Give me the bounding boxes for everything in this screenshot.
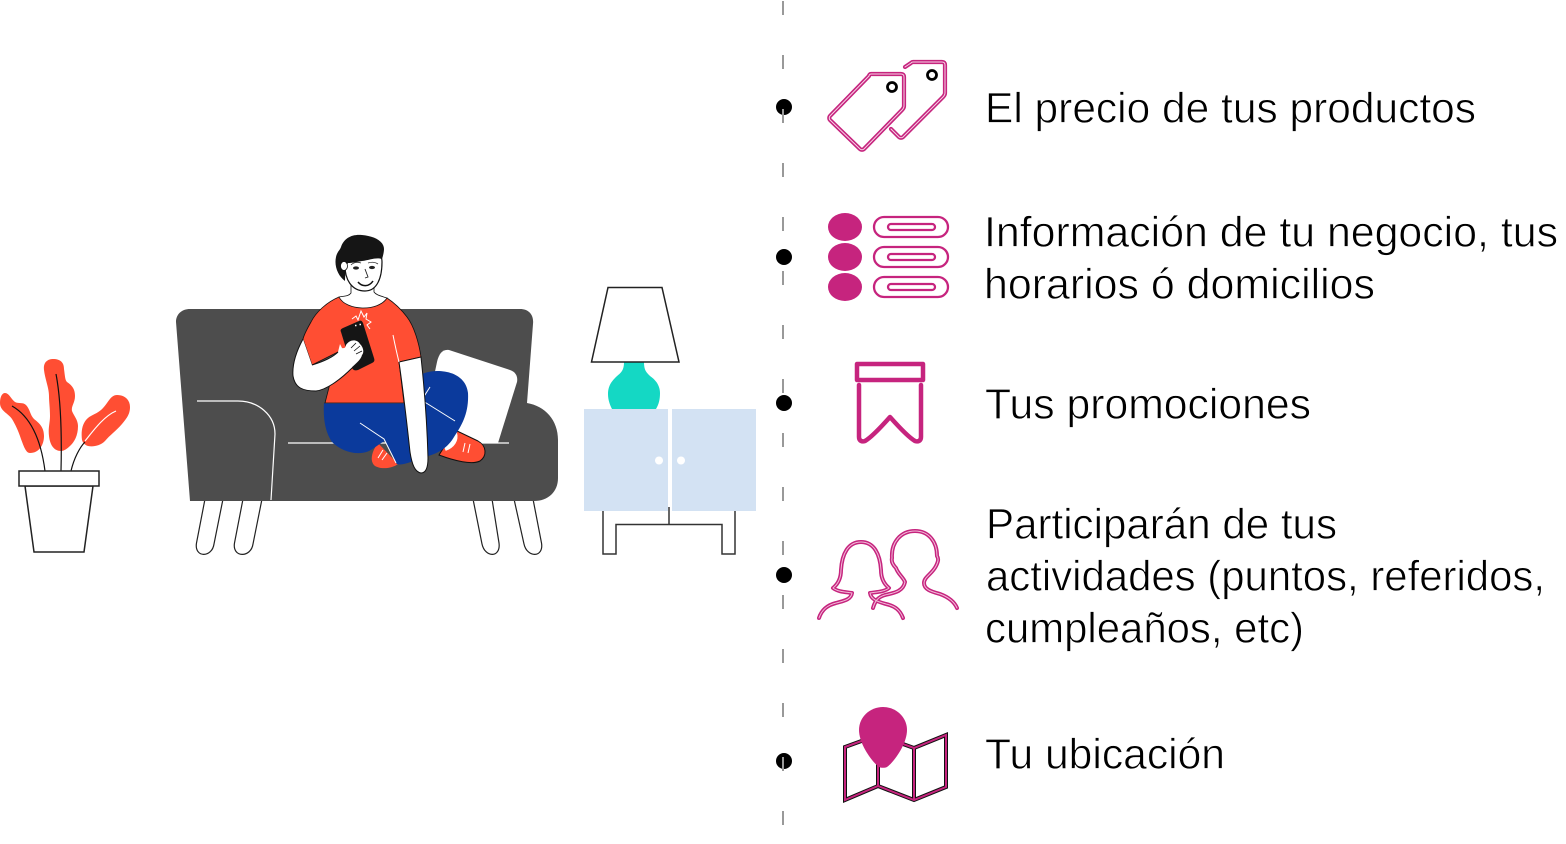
icon: map with pin	[845, 707, 946, 800]
plant stems	[12, 374, 85, 471]
item: activities	[819, 502, 1545, 652]
text: location: Tu ubicación	[985, 732, 1225, 778]
icon: price tags	[829, 62, 945, 150]
cabinet doors	[584, 409, 756, 511]
sofa body	[176, 309, 558, 501]
lamp shade	[592, 288, 679, 362]
left arm	[293, 339, 352, 391]
text: activities	[985, 502, 1545, 652]
text: activities: cumpleaños, etc)	[985, 606, 1304, 652]
right arm	[399, 357, 428, 473]
smartphone	[341, 321, 374, 370]
timeline bullets	[776, 99, 792, 769]
illustration: person on sofa	[293, 235, 485, 473]
text: business information: Información de tu negocio, tus	[984, 210, 1558, 256]
item: promotions	[857, 364, 1311, 441]
phone signal burst	[352, 311, 371, 329]
neck and head	[335, 235, 387, 308]
item: price	[829, 62, 1476, 150]
illustration: plant in pot	[0, 359, 130, 552]
text: activities: Participarán de tus	[986, 502, 1337, 548]
item: business information	[828, 210, 1558, 308]
illustration: table lamp	[592, 288, 679, 409]
text: price: El precio de tus productos	[985, 86, 1476, 132]
item: location	[845, 707, 1225, 800]
text: business information: horarios ó domicilios	[984, 262, 1375, 308]
hand on phone	[338, 340, 363, 369]
illustration: sofa	[176, 309, 558, 554]
shoes	[372, 430, 485, 468]
trousers	[324, 371, 468, 464]
phone camera dots	[355, 324, 361, 326]
pot	[19, 471, 99, 552]
timeline	[776, 1, 792, 825]
text: business information	[984, 210, 1558, 308]
lamp base	[608, 362, 660, 409]
text: activities: actividades (puntos, referidos,	[986, 554, 1545, 600]
t-shirt	[303, 297, 421, 403]
cabinet legs	[603, 507, 735, 554]
sofa armrest and seat lines	[197, 401, 509, 500]
illustration: side cabinet	[584, 409, 756, 554]
plant leaves	[0, 359, 130, 453]
trouser crease lines	[325, 387, 455, 463]
illustration: pillow	[420, 350, 517, 443]
icon: bookmark	[857, 364, 923, 441]
sofa legs	[196, 499, 542, 554]
icon: people	[819, 531, 957, 618]
text: promotions: Tus promociones	[985, 382, 1311, 428]
timeline dashed line	[782, 1, 784, 825]
cabinet knobs	[655, 456, 685, 464]
icon: list	[828, 213, 948, 301]
